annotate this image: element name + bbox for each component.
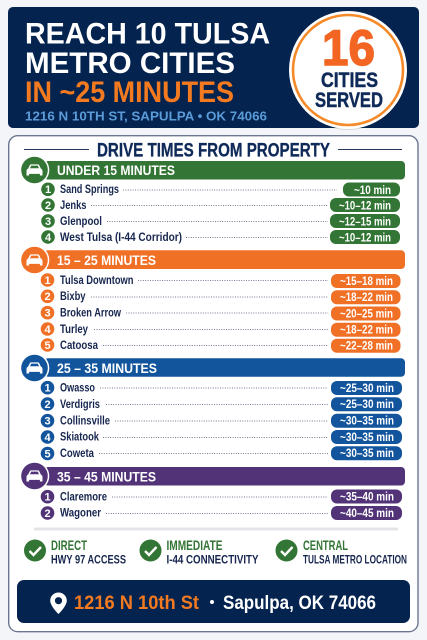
address text [74,593,376,614]
row: Turley: 4 [44,324,51,336]
row: Tulsa Downtown: 1 [44,275,51,287]
address text: Sapulpa, OK 74066 [223,593,376,614]
row: Verdigris: ~25–30 min [340,399,394,411]
row: Bixby: ~18–22 min [340,292,393,304]
row: Glenpool [41,214,400,228]
row: Jenks [41,198,400,212]
row: Collinsville [41,414,402,428]
row: Sand Springs: Sand Springs [60,182,119,196]
row: Turley: Turley [60,322,88,336]
section: under 15 minutes [20,155,405,244]
row: Collinsville: ~30–35 min [340,416,394,428]
row: Tulsa Downtown: Tulsa Downtown [60,273,134,287]
row: West Tulsa: 4 [45,232,52,244]
row: Sand Springs: ~10 min [354,185,391,197]
row: Skiatook [41,430,402,444]
row: Wagoner [41,506,402,520]
section: 15 to 25 minutes [20,245,405,353]
row: Jenks: Jenks [60,198,87,212]
row: Tulsa Downtown: ~15–18 min [340,276,393,288]
row: Broken Arrow: Broken Arrow [60,306,122,320]
row: West Tulsa [41,230,400,244]
row: Broken Arrow: 3 [44,308,51,320]
row: Turley [41,322,400,337]
row: Skiatook: ~30–35 min [340,432,394,444]
row: Owasso: ~25–30 min [340,383,394,395]
row: Glenpool: Glenpool [60,214,102,228]
address subtitle: 1216 N 10TH ST, SAPULPA • OK 74066 [25,108,267,124]
feature: immediate: I-44 CONNECTIVITY [166,554,259,566]
row: Broken Arrow [41,306,400,320]
row: Jenks: ~10–12 min [339,200,391,212]
row: Wagoner: Wagoner [60,506,101,520]
title [25,18,270,109]
row: Verdigris [41,397,402,411]
title: METRO CITIES [25,47,235,80]
row: Sand Springs: 1 [45,184,51,196]
badge: 16 cities served: 16 [322,20,375,76]
row: Glenpool: 3 [45,216,51,228]
heading: DRIVE TIMES FROM PROPERTY [97,140,330,162]
row: Bixby [41,289,400,304]
section header: 15 – 25 MINUTES [57,252,156,268]
section header: 25 – 35 MINUTES [57,360,157,376]
row: Wagoner: 2 [44,508,51,520]
feature: immediate [140,537,259,566]
row: Claremore: 1 [44,492,51,504]
row: Catoosa: 5 [44,340,51,352]
row: Catoosa: Catoosa [60,338,98,352]
row: Owasso: 1 [44,383,51,395]
icon: location pin [50,592,67,614]
row: Collinsville: 3 [44,416,51,428]
feature: central: CENTRAL [303,537,348,553]
row: Owasso: Owasso [60,380,95,394]
section header: UNDER 15 MINUTES [57,162,175,178]
badge: 16 cities served: SERVED [315,89,383,112]
row: Catoosa: ~22–28 min [340,341,393,353]
badge: 16 cities served [289,11,407,130]
title: REACH 10 TULSA [25,18,270,50]
row: Wagoner: ~40–45 min [340,508,394,520]
title: IN ~25 MINUTES [25,76,234,109]
row: West Tulsa: ~10–12 min [339,232,391,244]
row: Collinsville: Collinsville [60,414,110,428]
row: Turley: ~18–22 min [340,325,393,337]
section: 25 to 35 minutes [20,353,405,460]
row: Coweta: Coweta [60,446,94,460]
row: Bixby: 2 [44,291,51,303]
badge: 16 cities served: CITIES [321,69,378,92]
section header [20,353,405,383]
row: Tulsa Downtown [41,273,400,288]
row: Sand Springs [41,182,400,197]
feature: direct: HWY 97 ACCESS [51,554,126,566]
address text: 1216 N 10th St [74,593,200,614]
row: Verdigris: Verdigris [60,397,100,411]
row: Jenks: 2 [45,200,51,212]
feature: immediate: IMMEDIATE [166,537,222,553]
row: Broken Arrow: ~20–25 min [340,308,393,320]
feature: direct [24,537,126,566]
row: Coweta [41,446,402,460]
row: Catoosa [41,338,400,353]
row: West Tulsa: West Tulsa (I-44 Corridor) [60,230,182,244]
panel: drive times [9,136,418,632]
row: Owasso [41,380,402,395]
row: Bixby: Bixby [60,289,86,303]
section: 35 to 45 minutes [20,461,405,520]
row: Verdigris: 2 [44,399,51,411]
row: Glenpool: ~12–15 min [339,216,391,228]
row: Claremore: Claremore [60,490,107,504]
header banner [8,7,419,130]
section header: 35 – 45 MINUTES [57,468,156,484]
feature: central [276,537,407,566]
section header [20,155,405,185]
feature: direct: DIRECT [51,537,87,553]
row: Claremore [41,490,402,504]
row: Coweta: ~30–35 min [340,448,394,460]
row: Skiatook: 4 [44,432,51,444]
address bar [17,580,410,623]
section header [20,461,405,491]
section header [20,245,405,275]
row: Skiatook: Skiatook [60,430,99,444]
row: Claremore: ~35–40 min [340,491,394,503]
row: Coweta: 5 [44,448,51,460]
